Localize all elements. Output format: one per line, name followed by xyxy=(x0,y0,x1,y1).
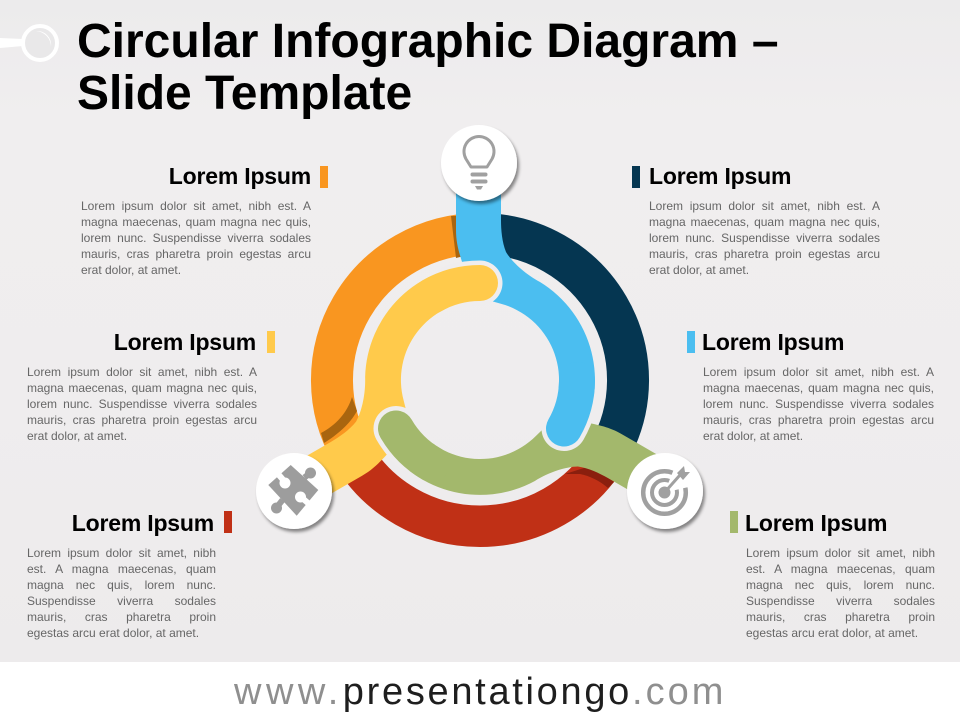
body text xyxy=(27,546,216,640)
body text: magna nec quis, lorem nunc. xyxy=(27,578,216,592)
ribbon: blue xyxy=(456,190,595,438)
body text: lorem nunc. Suspendisse viverra sodales xyxy=(649,231,880,245)
body text: Lorem ipsum dolor sit amet, nibh est. A xyxy=(649,199,880,213)
heading: Lorem Ipsum xyxy=(114,329,256,355)
panel: yellow xyxy=(27,329,275,443)
body text: erat dolor, at amet. xyxy=(703,429,803,443)
body text: est. A magna maecenas, quam xyxy=(27,562,216,576)
body text xyxy=(703,365,934,443)
body text: egestas arcu erat dolor, at amet. xyxy=(27,626,199,640)
body text: mauris, cras pharetra proin egestas arcu xyxy=(649,247,880,261)
heading: Lorem Ipsum xyxy=(745,510,887,536)
marker: orange xyxy=(320,166,328,188)
title: Slide Template xyxy=(77,67,412,120)
marker: navy xyxy=(632,166,640,188)
marker: red xyxy=(224,511,232,533)
body text: Lorem ipsum dolor sit amet, nibh xyxy=(27,546,216,560)
body text: magna maecenas, quam magna nec quis, xyxy=(27,381,257,395)
body text: mauris, cras pharetra proin xyxy=(27,610,216,624)
heading: Lorem Ipsum xyxy=(169,163,311,189)
body text: mauris, cras pharetra proin egestas arcu xyxy=(27,413,257,427)
body text: lorem nunc. Suspendisse viverra sodales xyxy=(27,397,257,411)
body text: erat dolor, at amet. xyxy=(81,263,181,277)
body text: magna nec quis, lorem nunc. xyxy=(746,578,935,592)
body text: Lorem ipsum dolor sit amet, nibh est. A xyxy=(27,365,257,379)
footer website text: www.presentationgo.com xyxy=(234,671,726,713)
panel: blue xyxy=(687,329,934,443)
body text: magna maecenas, quam magna nec quis, xyxy=(81,215,311,229)
title xyxy=(77,15,779,120)
marker: blue xyxy=(687,331,694,353)
marker: green xyxy=(730,511,738,533)
title: Circular Infographic Diagram – xyxy=(77,15,779,68)
icon: target xyxy=(627,453,703,529)
body text: lorem nunc. Suspendisse viverra sodales xyxy=(703,397,934,411)
inner ribbons xyxy=(258,190,657,575)
body text: Suspendisse viverra sodales xyxy=(746,594,935,608)
panel: orange xyxy=(81,163,328,277)
heading: Lorem Ipsum xyxy=(702,329,844,355)
body text: Suspendisse viverra sodales xyxy=(27,594,216,608)
body text: mauris, cras pharetra proin egestas arcu xyxy=(81,247,311,261)
heading: Lorem Ipsum xyxy=(72,510,214,536)
body text: lorem nunc. Suspendisse viverra sodales xyxy=(81,231,311,245)
body text: est. A magna maecenas, quam xyxy=(746,562,935,576)
body text: Lorem ipsum dolor sit amet, nibh est. A xyxy=(703,365,934,379)
body text: mauris, cras pharetra proin xyxy=(746,610,935,624)
ring shadows xyxy=(321,216,614,488)
body text: magna maecenas, quam magna nec quis, xyxy=(703,381,934,395)
panel: green xyxy=(730,510,935,640)
panel: red xyxy=(27,510,232,640)
icon: logo ring xyxy=(0,24,59,62)
ribbon: yellow xyxy=(258,252,542,496)
outer ring segments xyxy=(332,234,628,526)
body text: magna maecenas, quam magna nec quis, xyxy=(649,215,880,229)
body text: Lorem ipsum dolor sit amet, nibh xyxy=(746,546,935,560)
footer band xyxy=(0,662,960,720)
ribbon heads xyxy=(389,272,577,464)
panel: navy xyxy=(632,163,880,277)
heading: Lorem Ipsum xyxy=(649,163,791,189)
body text xyxy=(27,365,257,443)
body text xyxy=(649,199,880,277)
body text: egestas arcu erat dolor, at amet. xyxy=(746,626,918,640)
ribbon: green xyxy=(373,330,657,575)
icon: light bulb xyxy=(441,125,517,201)
body text: erat dolor, at amet. xyxy=(649,263,749,277)
body text xyxy=(81,199,311,277)
body text: mauris, cras pharetra proin egestas arcu xyxy=(703,413,934,427)
body text xyxy=(746,546,935,640)
icon: puzzle piece xyxy=(256,453,332,529)
marker: yellow xyxy=(267,331,274,353)
body text: erat dolor, at amet. xyxy=(27,429,127,443)
body text: Lorem ipsum dolor sit amet, nibh est. A xyxy=(81,199,311,213)
